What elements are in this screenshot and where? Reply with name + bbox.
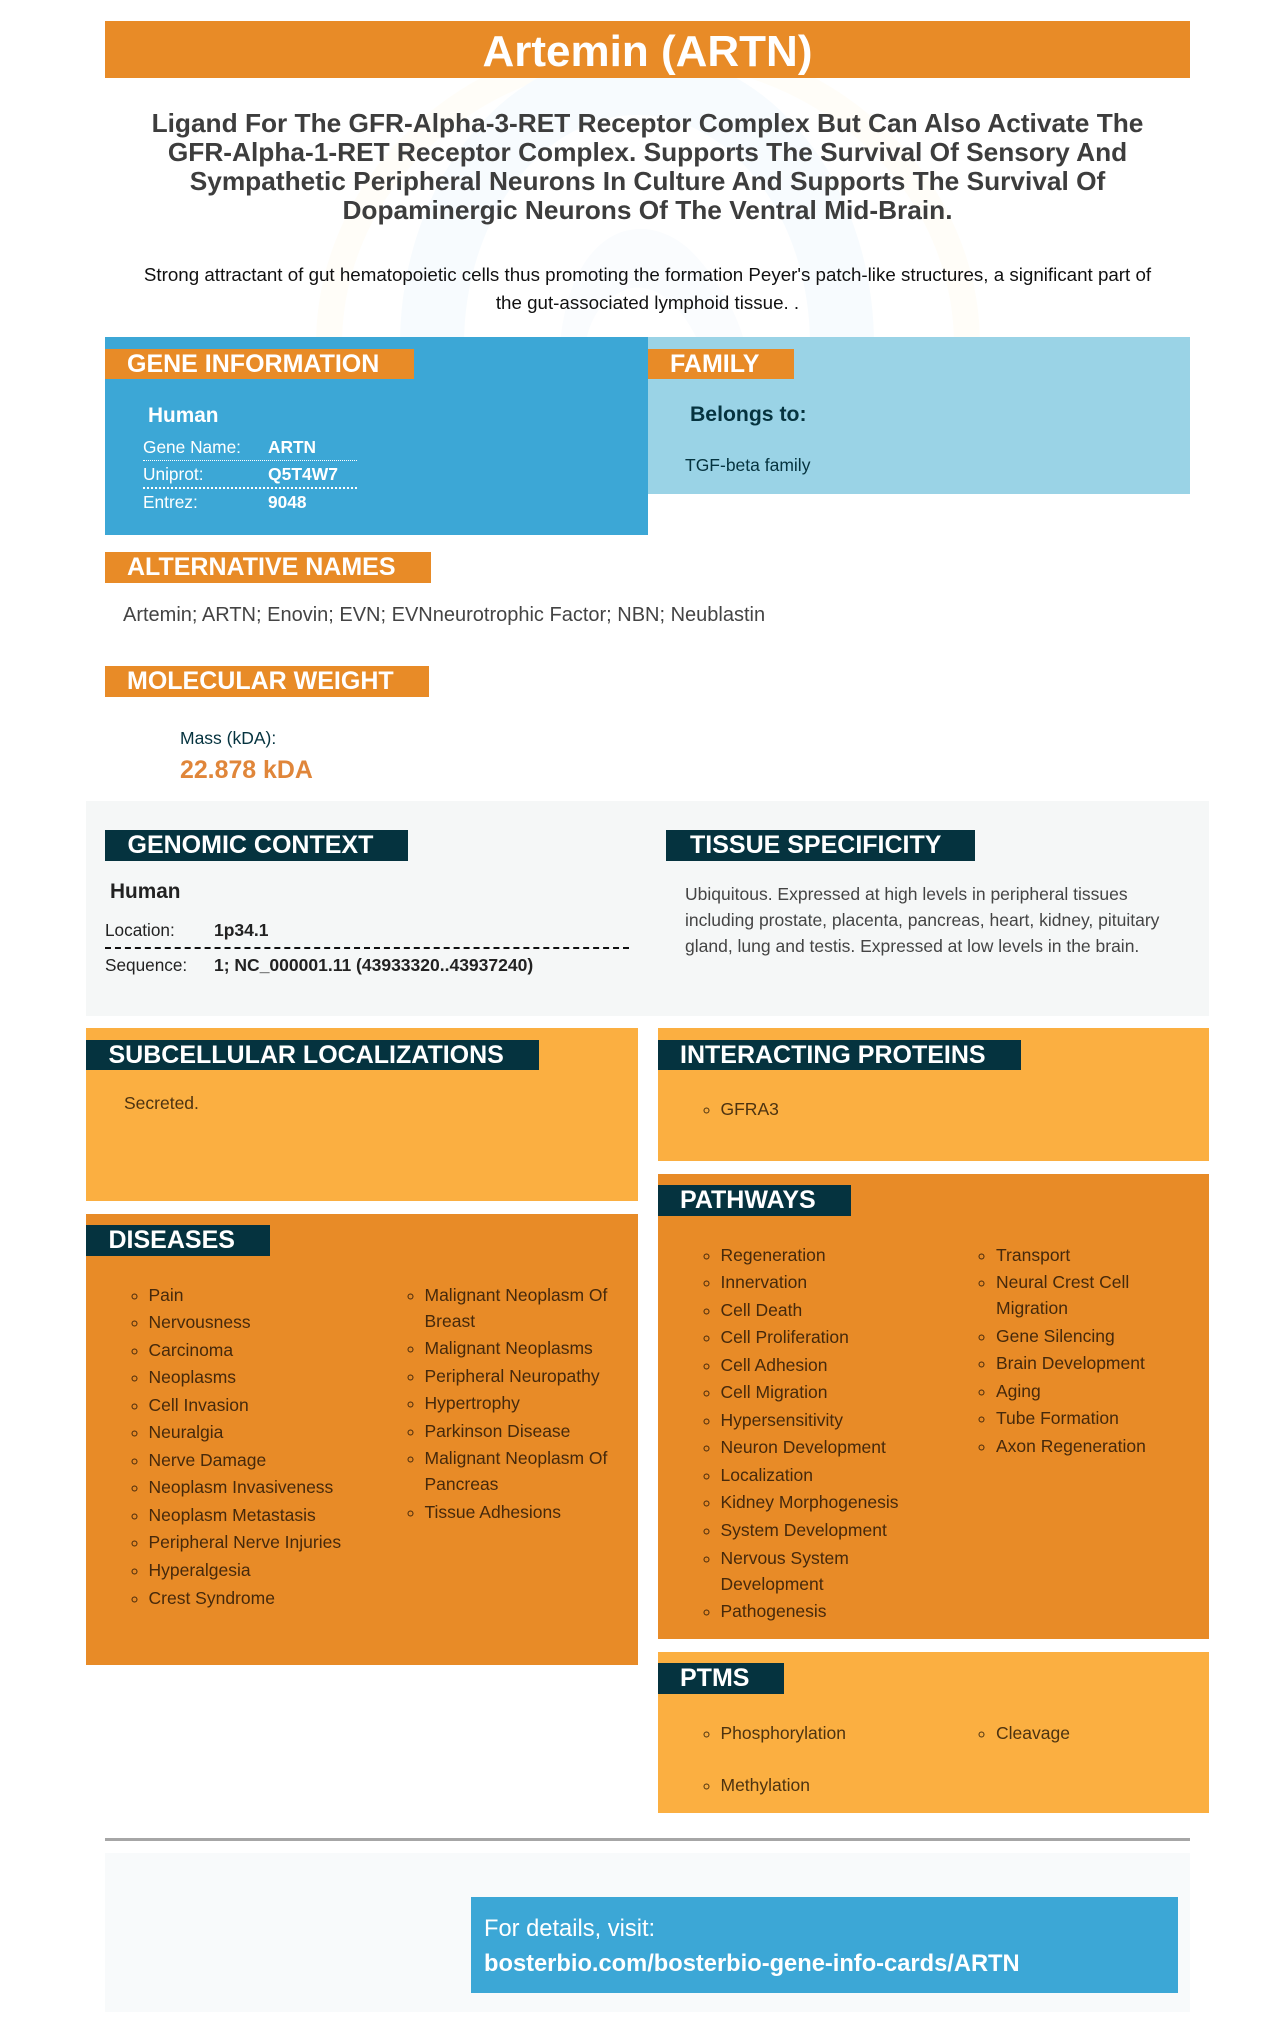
heading: tissue specificity: TISSUE SPECIFICITY — [690, 831, 941, 859]
alternative names text: Artemin; ARTN; Enovin; EVN; EVNneurotrophic Factor; NBN; Neublastin — [123, 604, 765, 626]
disease list column 1: Nerve Damage — [148, 1450, 266, 1470]
panel: interacting proteins — [658, 1028, 1209, 1161]
belongs to label: Belongs to: — [690, 403, 807, 426]
disease list column 1: Pain — [148, 1284, 184, 1304]
protein list: GFRA3 — [720, 1098, 779, 1118]
disease list column 1: Crest Syndrome — [148, 1588, 275, 1608]
pathway list column 2: Gene Silencing — [996, 1326, 1115, 1346]
ptm list column 1 — [704, 1723, 846, 1795]
entrez row: 9048 — [268, 492, 306, 512]
pathway list column 1 — [704, 1244, 899, 1621]
disease list column 2: Peripheral Neuropathy — [424, 1366, 600, 1386]
ptm list column 1: Methylation — [720, 1775, 810, 1795]
panel: diseases — [86, 1214, 638, 1665]
species label: Human — [148, 404, 218, 427]
pathway list column 1: Hypersensitivity — [720, 1410, 843, 1430]
title banner — [105, 21, 1190, 78]
disease list column 1 — [132, 1284, 341, 1608]
disease list column 2: Hypertrophy — [424, 1393, 520, 1413]
heading: pathways: PATHWAYS — [680, 1186, 816, 1214]
disease list column 2: Tissue Adhesions — [424, 1502, 561, 1522]
uniprot row — [143, 461, 357, 489]
panel: genomic context and tissue specificity — [86, 801, 1209, 1016]
pathway list column 2: Neural Crest Cell Migration — [996, 1272, 1129, 1318]
pathway list column 2: Brain Development — [996, 1353, 1145, 1373]
title banner: Artemin (ARTN) — [482, 27, 812, 76]
gene name row: Gene Name: — [143, 437, 241, 457]
pathway list column 2: Tube Formation — [996, 1408, 1119, 1428]
pathway list column 1: Localization — [720, 1465, 813, 1485]
entrez row — [143, 492, 306, 512]
pathway list column 2: Axon Regeneration — [996, 1436, 1146, 1456]
tissue specificity text: gland, lung and testis. Expressed at low levels in the brain. — [685, 936, 1139, 956]
family value: TGF-beta family — [685, 455, 810, 475]
location row: Location: — [105, 920, 175, 940]
tissue specificity text — [685, 884, 1160, 956]
location row: 1p34.1 — [214, 920, 268, 940]
heading: family: FAMILY — [670, 350, 759, 378]
sequence row: 1; NC_000001.11 (43933320..43937240) — [214, 955, 533, 975]
disease list column 1: Peripheral Nerve Injuries — [148, 1532, 341, 1552]
panel: ptms — [658, 1652, 1209, 1813]
uniprot row: Q5T4W7 — [268, 464, 338, 484]
pathway list column 2 — [978, 1244, 1146, 1456]
disease list column 1: Nervousness — [148, 1312, 251, 1332]
heading: diseases — [86, 1225, 270, 1256]
heading: genomic context: GENOMIC CONTEXT — [128, 831, 373, 859]
heading: ptms — [658, 1663, 784, 1694]
panel: footer — [105, 1853, 1190, 2012]
localization text: Secreted. — [124, 1093, 199, 1113]
pathway list column 1: System Development — [720, 1520, 887, 1540]
species label: Human — [110, 880, 180, 903]
disease list column 1: Cell Invasion — [148, 1395, 249, 1415]
pathway list column 1: Cell Adhesion — [720, 1355, 828, 1375]
subtitle: GFR-Alpha-1-RET Receptor Complex. Supports The Survival Of Sensory And — [168, 137, 1127, 167]
disease list column 1: Neoplasm Metastasis — [148, 1505, 316, 1525]
heading: diseases: DISEASES — [108, 1226, 235, 1254]
subtitle — [152, 108, 1143, 225]
pathway list column 1: Nervous System Development — [720, 1548, 849, 1594]
disease list column 1: Carcinoma — [148, 1340, 233, 1360]
heading: ptms: PTMS — [680, 1664, 749, 1692]
callout: details link — [471, 1897, 1178, 1993]
pathway list column 2: Transport — [996, 1244, 1070, 1264]
heading: interacting proteins: INTERACTING PROTEINS — [680, 1041, 986, 1069]
mass label: Mass (kDA): — [180, 728, 276, 748]
disease list column 2: Malignant Neoplasm Of Breast — [424, 1284, 607, 1330]
uniprot row: Uniprot: — [143, 464, 204, 484]
entrez row: Entrez: — [143, 492, 198, 512]
heading: molecular weight: MOLECULAR WEIGHT — [127, 667, 394, 695]
pathway list column 1: Cell Migration — [720, 1382, 827, 1402]
background watermark — [0, 0, 1288, 345]
panel: subcellular localizations — [86, 1028, 638, 1201]
heading: gene information: GENE INFORMATION — [127, 350, 379, 378]
panel: family — [648, 337, 1190, 494]
description: the gut-associated lymphoid tissue. . — [496, 292, 799, 313]
disease list column 1: Neoplasm Invasiveness — [148, 1477, 333, 1497]
ptm list column 1: Phosphorylation — [720, 1723, 846, 1743]
subtitle: Sympathetic Peripheral Neurons In Culture And Supports The Survival Of — [190, 166, 1105, 196]
tissue specificity text: Ubiquitous. Expressed at high levels in peripheral tissues — [685, 884, 1128, 904]
disease list column 2: Parkinson Disease — [424, 1421, 570, 1441]
tissue specificity text: including prostate, placenta, pancreas, heart, kidney, pituitary — [685, 910, 1159, 930]
subtitle: Dopaminergic Neurons Of The Ventral Mid-Brain. — [342, 195, 953, 225]
location row — [105, 918, 629, 949]
pathway list column 1: Cell Proliferation — [720, 1327, 849, 1347]
description — [144, 264, 1152, 313]
pathway list column 1: Neuron Development — [720, 1437, 886, 1457]
pathway list column 2: Aging — [996, 1381, 1041, 1401]
pathway list column 1: Regeneration — [720, 1244, 826, 1264]
pathway list column 1: Kidney Morphogenesis — [720, 1492, 899, 1512]
disease list column 2: Malignant Neoplasm Of Pancreas — [424, 1448, 607, 1494]
heading: subcellular localizations: SUBCELLULAR LOCALIZATIONS — [108, 1041, 504, 1069]
pathway list column 1: Innervation — [720, 1272, 807, 1292]
sequence row: Sequence: — [105, 955, 187, 975]
pathway list column 1: Cell Death — [720, 1300, 802, 1320]
details url: bosterbio.com/bosterbio-gene-info-cards/ARTN — [484, 1951, 1020, 1977]
mass value: 22.878 kDA — [180, 756, 313, 784]
disease list column 1: Neoplasms — [148, 1367, 236, 1387]
panel: pathways — [658, 1174, 1209, 1639]
subtitle: Ligand For The GFR-Alpha-3-RET Receptor Complex But Can Also Activate The — [152, 108, 1143, 138]
gene name row — [143, 434, 357, 461]
description: Strong attractant of gut hematopoietic cells thus promoting the formation Peyer's patch-like structures, a significant part of — [144, 264, 1151, 285]
gene name row: ARTN — [268, 437, 316, 457]
disease list column 1: Neuralgia — [148, 1422, 223, 1442]
heading: alternative names: ALTERNATIVE NAMES — [127, 553, 396, 581]
pathway list column 1: Pathogenesis — [720, 1601, 827, 1621]
heading: family — [648, 349, 794, 379]
disease list column 1: Hyperalgesia — [148, 1560, 251, 1580]
disease list column 2 — [408, 1284, 608, 1522]
ptm list column 2: Cleavage — [996, 1723, 1070, 1743]
panel: gene information — [105, 337, 648, 535]
heading: pathways — [658, 1185, 851, 1216]
details label: For details, visit: — [484, 1916, 655, 1942]
disease list column 2: Malignant Neoplasms — [424, 1338, 593, 1358]
